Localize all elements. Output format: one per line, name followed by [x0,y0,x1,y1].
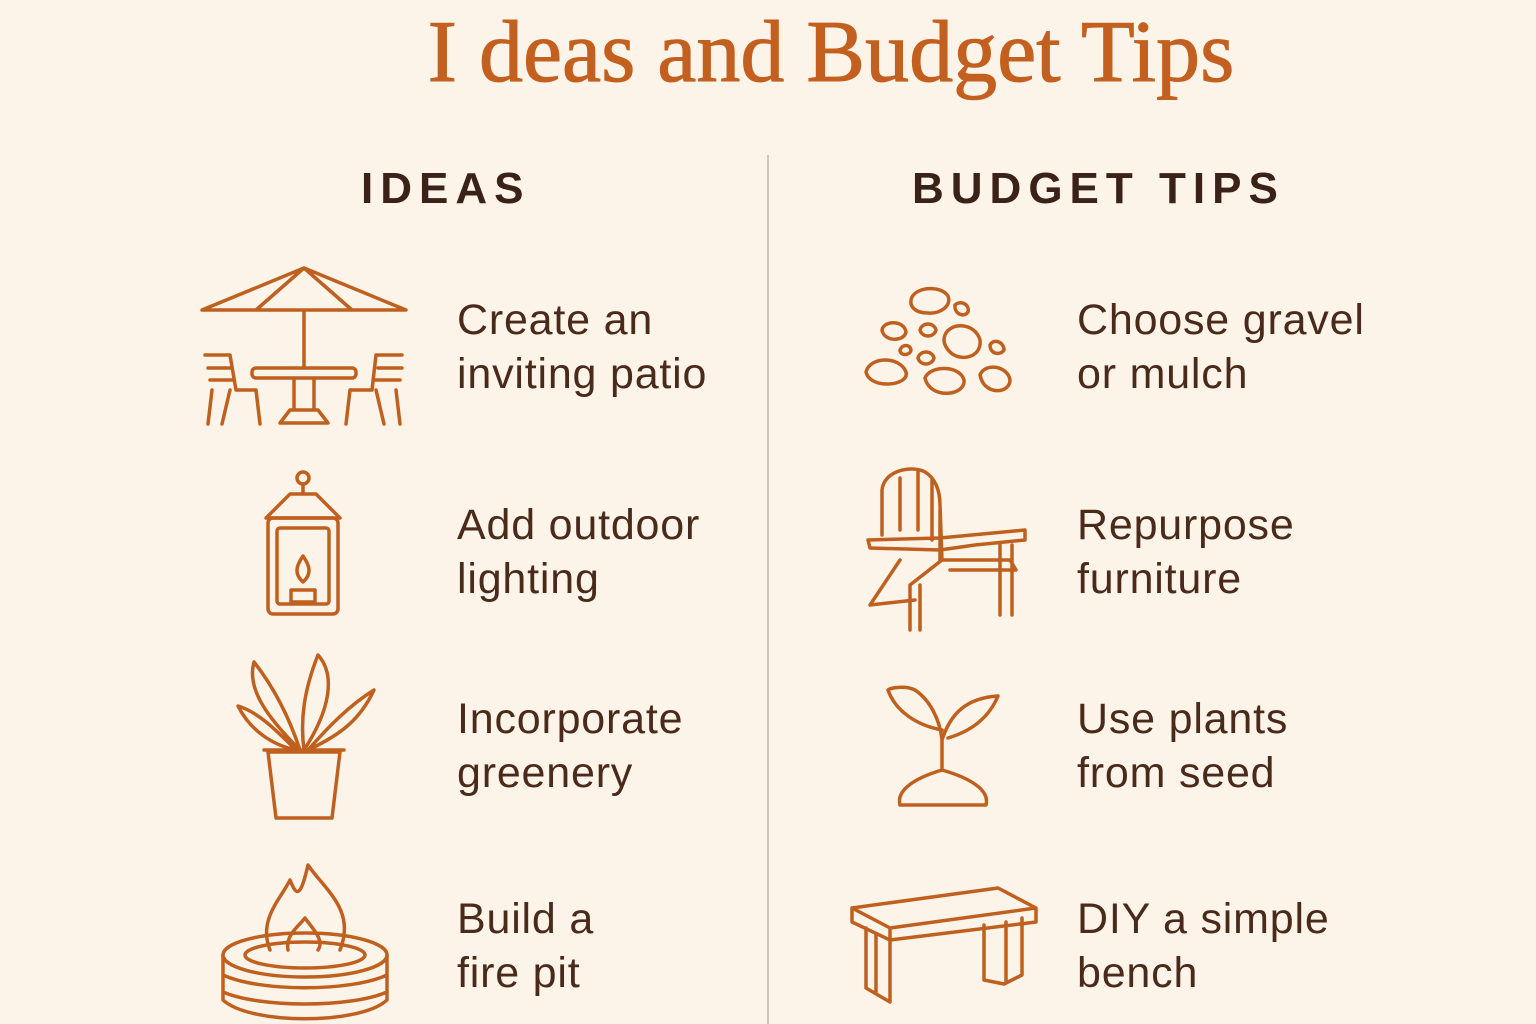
title: I deas and Budget Tips [428,4,1234,101]
text: gravel: Choose gravel [1077,296,1365,344]
icon: gravel [866,289,1010,393]
icon: sprout [888,687,998,805]
text: greenery: greenery [457,749,633,797]
icon: patio umbrella [202,268,406,424]
text: seeds [1077,695,1288,797]
icon: potted plant [238,655,374,818]
text: lighting: Add outdoor [457,501,700,549]
icon: lantern [266,472,340,614]
icon: fire pit [223,865,387,1019]
text: lighting [457,501,700,603]
text: bench [1077,895,1330,997]
heading: budget tips: BUDGET TIPS [912,164,1285,213]
icon: bench [852,888,1036,1002]
text: repurpose: Repurpose [1077,501,1295,549]
text: gravel [1077,296,1365,398]
text: fire pit: Build a [457,895,594,943]
text: bench: bench [1077,949,1198,997]
text: patio [457,296,707,398]
text: seeds: from seed [1077,749,1275,797]
text: greenery [457,695,683,797]
text: patio: inviting patio [457,350,707,398]
divider [767,155,769,1024]
text: lighting: lighting [457,555,600,603]
text: bench: DIY a simple [1077,895,1330,943]
text: patio: Create an [457,296,653,344]
text: repurpose: furniture [1077,555,1242,603]
text: greenery: Incorporate [457,695,683,743]
text: seeds: Use plants [1077,695,1288,743]
text: fire pit [457,895,594,997]
icon: adirondack chair [868,469,1025,630]
text: repurpose [1077,501,1295,603]
text: gravel: or mulch [1077,350,1248,398]
text: fire pit: fire pit [457,949,580,997]
heading: ideas: IDEAS [361,164,530,213]
